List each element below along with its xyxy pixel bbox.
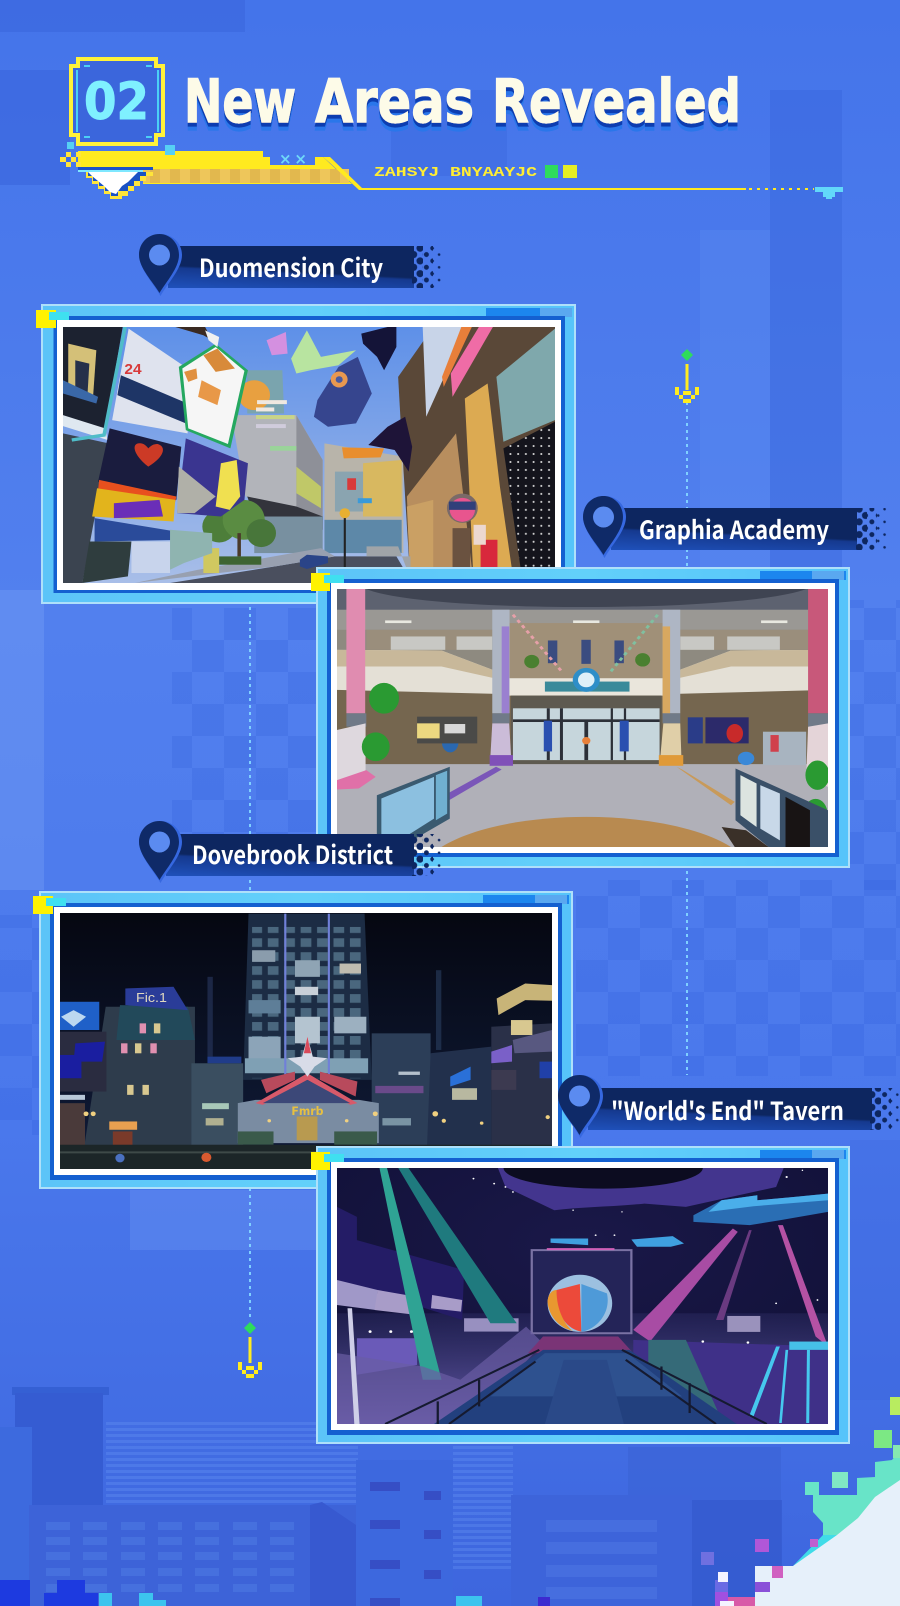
dotted guide lines: [250, 402, 687, 1320]
bottom pixel decorations: [0, 1580, 550, 1606]
frame: Duomension City: [36, 305, 575, 603]
photo: academy lobby: [337, 589, 828, 847]
header: section number badge: [71, 59, 163, 144]
label: Graphia Academy: Graphia Academy: [639, 511, 830, 547]
arrow: left guide arrow: [238, 1322, 262, 1378]
photo: tavern stage: [337, 1168, 828, 1424]
header: yellow ribbon and rule: [60, 142, 843, 199]
background skyline: [0, 1387, 782, 1606]
photo: city street with billboards: 24: [124, 362, 142, 378]
label: Graphia Academy: [583, 496, 887, 558]
icon: map pin: [139, 821, 182, 883]
photo: night district skyline: [60, 913, 552, 1169]
label: Dovebrook District: [139, 821, 443, 883]
header: title: [184, 67, 741, 137]
photo: night district skyline: Fmrb: [291, 1104, 323, 1118]
label: World's End Tavern: "World's End" Tavern: [611, 1092, 844, 1128]
header: title: Revealed: [492, 67, 741, 137]
header: yellow ribbon and rule: ××: [279, 150, 307, 168]
icon: map pin: [583, 496, 626, 558]
label: Dovebrook District: Dovebrook District: [192, 836, 393, 872]
label: Duomension City: Duomension City: [199, 249, 384, 285]
icon: map pin: [558, 1075, 603, 1138]
header: yellow ribbon and rule: ZAHSYJ BNYAAYJC: [374, 165, 538, 181]
photo: city street with billboards: [63, 327, 555, 583]
label: Duomension City: [139, 234, 443, 296]
frame: Dovebrook District: [33, 892, 572, 1188]
bottom right pixel splash: [701, 1397, 900, 1606]
arrow: right guide arrow: [675, 349, 699, 403]
frame: Graphia Academy: [311, 568, 849, 867]
header: title: New: [184, 67, 296, 137]
frame: World's End Tavern: [311, 1147, 849, 1443]
icon: map pin: [139, 234, 182, 296]
label: World's End Tavern: [558, 1075, 900, 1138]
photo: night district skyline: Fic.1: [136, 990, 167, 1005]
header: section number badge: 02: [84, 73, 149, 132]
header: title: Areas: [315, 67, 474, 137]
